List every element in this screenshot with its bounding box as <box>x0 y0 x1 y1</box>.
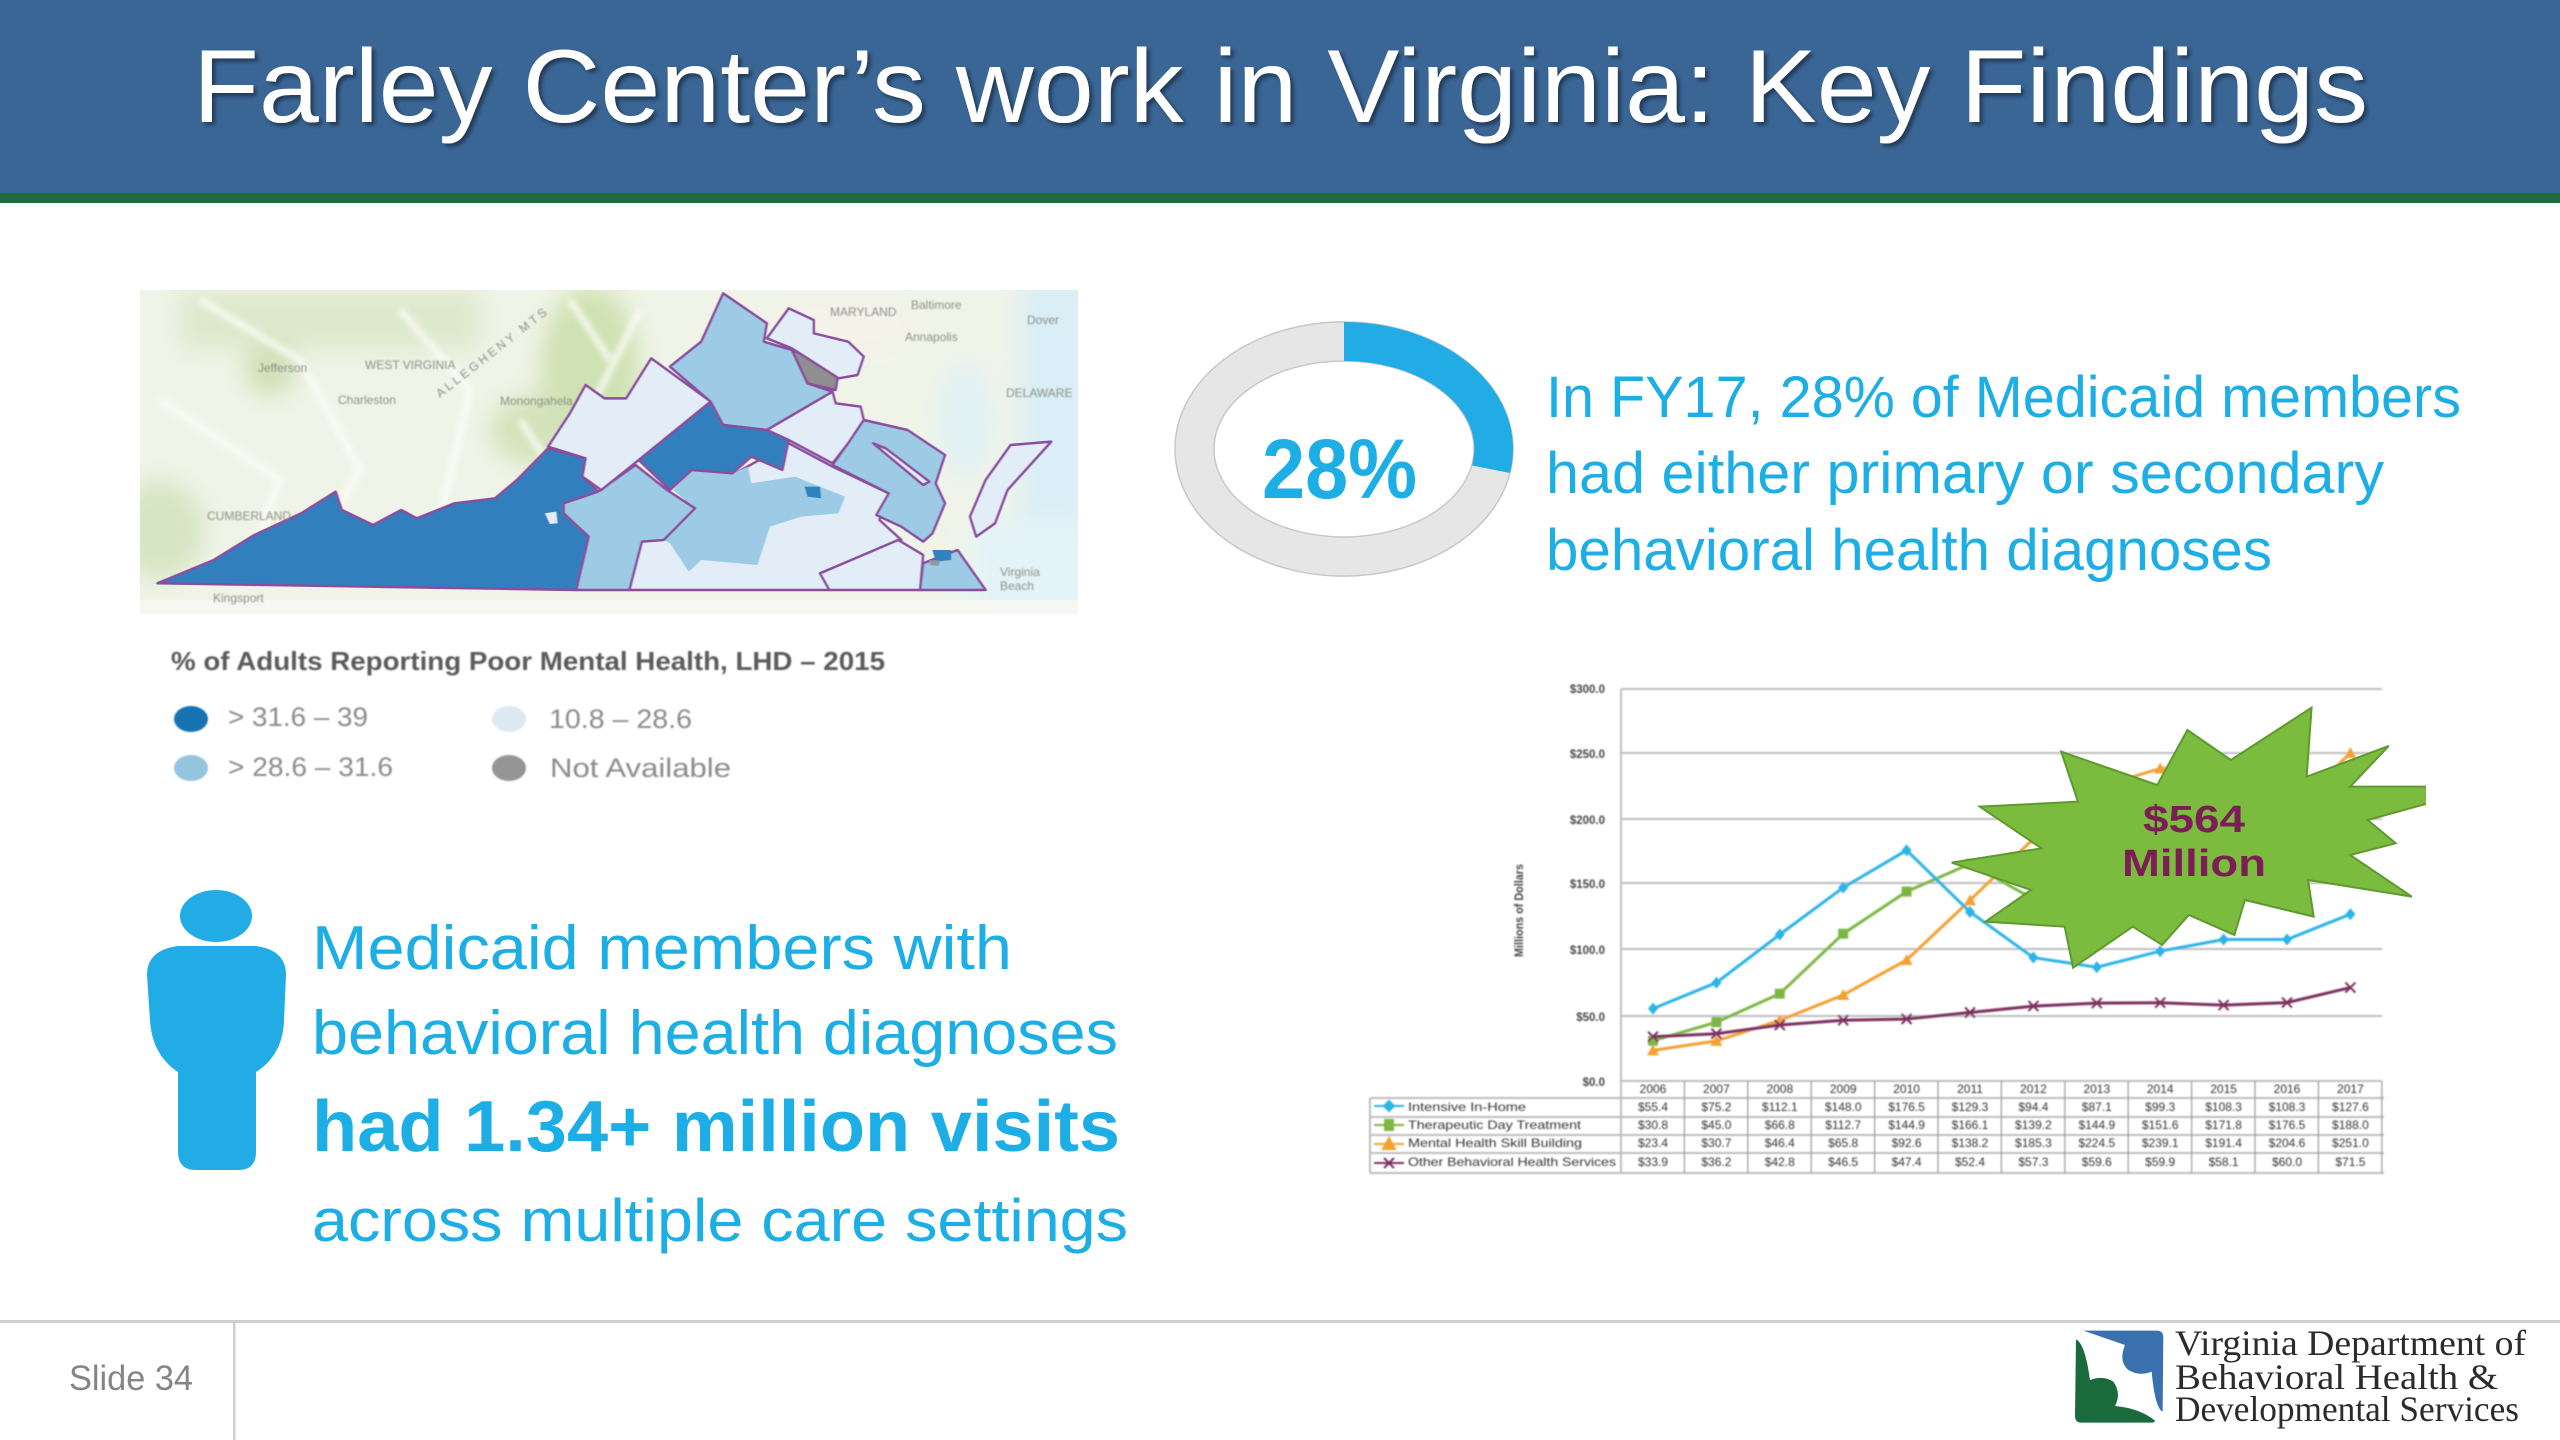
table row: therapeutic day treatment: $144.9 <box>1888 1118 1925 1132</box>
text block: FY17 statement: In FY17, 28% of Medicaid members <box>1546 365 2461 430</box>
data table grid <box>1370 1081 2384 1173</box>
logo wordmark: Virginia Department of <box>2175 1323 2526 1363</box>
table header years: 2016 <box>2274 1082 2301 1096</box>
callout: $564 million starburst <box>1952 708 2434 968</box>
table row: therapeutic day treatment: $139.2 <box>2015 1118 2052 1132</box>
table header years: 2014 <box>2147 1082 2174 1096</box>
table row: other behavioral health services: $59.9 <box>2145 1155 2176 1169</box>
table row: other behavioral health services: $59.6 <box>2082 1155 2112 1169</box>
legend item: gray: Not Available <box>550 753 731 783</box>
donut chart: 28% <box>1175 322 1513 576</box>
legend heading: % of Adults Reporting Poor Mental Health, LHD – 2015 <box>171 646 885 676</box>
table header years: 2013 <box>2083 1082 2110 1096</box>
table row: other behavioral health services: $52.4 <box>1955 1155 1985 1169</box>
table row: intensive in-home: $112.1 <box>1762 1100 1798 1114</box>
y axis labels: $250.0 <box>1570 749 1605 761</box>
map place labels: Charleston <box>338 393 396 407</box>
gridlines and axis <box>1619 687 2382 1083</box>
text block: FY17 statement: behavioral health diagnoses <box>1546 518 2272 583</box>
map terrain background <box>140 290 1078 614</box>
table row: mental health skill building: $30.7 <box>1701 1136 1732 1150</box>
table header years: 2009 <box>1830 1082 1857 1096</box>
table header years <box>1639 1084 2364 1094</box>
series: other behavioral health services <box>1653 988 2350 1037</box>
legend item: medium blue: > 28.6 – 31.6 <box>228 752 393 782</box>
table row: other behavioral health services: $36.2 <box>1701 1155 1732 1169</box>
table header years: 2008 <box>1766 1082 1793 1096</box>
table row: therapeutic day treatment <box>1374 1118 2369 1132</box>
legend item: pale blue <box>492 704 692 734</box>
table row: mental health skill building: $224.5 <box>2078 1136 2115 1150</box>
donut ring <box>1175 322 1513 576</box>
table row: therapeutic day treatment: Therapeutic Day Treatment <box>1408 1118 1582 1132</box>
text block: FY17 statement: had either primary or secondary <box>1546 441 2384 506</box>
table row: intensive in-home: $176.5 <box>1888 1100 1925 1114</box>
map place labels: Beach <box>1000 579 1034 593</box>
table row: mental health skill building: Mental Health Skill Building <box>1408 1136 1582 1150</box>
callout text: $564 <box>2143 799 2245 841</box>
table header years: 2012 <box>2020 1082 2047 1096</box>
table row: other behavioral health services: $47.4 <box>1892 1155 1922 1169</box>
map place labels: Jefferson <box>258 361 307 375</box>
map place labels: DELAWARE <box>1006 386 1072 400</box>
table row: mental health skill building: $92.6 <box>1892 1136 1922 1150</box>
table row: mental health skill building <box>1374 1136 2369 1150</box>
table row: other behavioral health services: $60.0 <box>2272 1155 2302 1169</box>
map place labels: Kingsport <box>213 591 264 605</box>
y axis title: Millions of Dollars <box>1514 864 1526 957</box>
table row: mental health skill building: $46.4 <box>1765 1136 1795 1150</box>
logo wordmark: Behavioral Health & <box>2175 1357 2498 1397</box>
donut arc <box>1344 322 1513 473</box>
table row: therapeutic day treatment: $66.8 <box>1765 1118 1795 1132</box>
text block: FY17 statement <box>1546 365 2461 583</box>
table header years: 2006 <box>1640 1082 1667 1096</box>
title: Farley Center’s work in Virginia: Key Findings <box>193 29 2368 145</box>
table row: intensive in-home: $108.3 <box>2269 1100 2306 1114</box>
map place labels: CUMBERLAND <box>207 509 291 523</box>
table row: therapeutic day treatment: $45.0 <box>1701 1118 1732 1132</box>
table row: other behavioral health services <box>1374 1155 2366 1169</box>
table row: intensive in-home: $94.4 <box>2018 1100 2049 1114</box>
y axis labels: $50.0 <box>1576 1012 1605 1024</box>
series: intensive in-home <box>1653 850 2350 1009</box>
table row: other behavioral health services: $58.1 <box>2209 1155 2239 1169</box>
text block: visits: behavioral health diagnoses <box>312 999 1118 1068</box>
map regions <box>158 293 1051 590</box>
table row: mental health skill building: $138.2 <box>1952 1136 1989 1150</box>
table row: other behavioral health services: $42.8 <box>1765 1155 1795 1169</box>
table row: therapeutic day treatment: $112.7 <box>1825 1118 1861 1132</box>
table row: other behavioral health services: $33.9 <box>1638 1155 1668 1169</box>
icon: person <box>147 890 286 1170</box>
table header years: 2007 <box>1703 1082 1730 1096</box>
table row: therapeutic day treatment: $144.9 <box>2078 1118 2115 1132</box>
y axis labels: $300.0 <box>1570 684 1605 696</box>
map place labels: ALLEGHENY MTS <box>433 303 552 400</box>
y axis labels: $0.0 <box>1583 1077 1605 1089</box>
logo: Virginia DBHDS <box>2075 1323 2526 1429</box>
legend item: dark blue: > 31.6 – 39 <box>228 702 368 732</box>
terrain bright strip <box>960 600 1078 614</box>
header band <box>0 0 2560 203</box>
text block: visits: had 1.34+ million visits <box>312 1087 1120 1167</box>
map place labels: Virginia <box>1000 565 1040 579</box>
table row: therapeutic day treatment: $30.8 <box>1638 1118 1668 1132</box>
table header years: 2015 <box>2210 1082 2237 1096</box>
table row: other behavioral health services: $46.5 <box>1828 1155 1859 1169</box>
map place labels: Baltimore <box>911 298 962 312</box>
table row: intensive in-home <box>1374 1100 2369 1114</box>
legend item: pale blue: 10.8 – 28.6 <box>549 704 692 734</box>
table row: intensive in-home: $99.3 <box>2145 1100 2176 1114</box>
table row: intensive in-home: $55.4 <box>1638 1100 1668 1114</box>
table row: therapeutic day treatment: $151.6 <box>2142 1118 2179 1132</box>
table header years: 2011 <box>1957 1082 1983 1096</box>
logo wordmark <box>2175 1323 2526 1429</box>
series: therapeutic day treatment <box>1647 858 2026 1047</box>
table row: mental health skill building: $239.1 <box>2142 1136 2179 1150</box>
table row: mental health skill building: $23.4 <box>1638 1136 1668 1150</box>
map place labels: Annapolis <box>905 330 958 344</box>
table row: intensive in-home: $129.3 <box>1952 1100 1989 1114</box>
text block: visits <box>312 914 1128 1254</box>
donut value: 28% <box>1262 422 1417 516</box>
y axis labels <box>1570 684 1605 1089</box>
table row: intensive in-home: $108.3 <box>2205 1100 2242 1114</box>
map place labels: WEST VIRGINIA <box>365 358 455 372</box>
table header years: 2017 <box>2337 1082 2364 1096</box>
table row: mental health skill building: $204.6 <box>2269 1136 2306 1150</box>
table row: mental health skill building: $191.4 <box>2205 1136 2242 1150</box>
table row: intensive in-home: $148.0 <box>1825 1100 1862 1114</box>
chart body <box>1370 684 2384 1173</box>
legend: map <box>171 646 885 783</box>
table row: mental health skill building: $65.8 <box>1828 1136 1859 1150</box>
map place labels: Dover <box>1027 313 1059 327</box>
text block: visits: across multiple care settings <box>312 1187 1128 1254</box>
panel: Virginia map <box>140 290 1078 614</box>
footer rules <box>0 1320 2560 1440</box>
y axis labels: $100.0 <box>1570 945 1605 957</box>
terrain ridges <box>162 298 642 530</box>
text block: visits: Medicaid members with <box>312 914 1012 983</box>
logo wordmark: Developmental Services <box>2175 1389 2519 1429</box>
table row: therapeutic day treatment: $176.5 <box>2269 1118 2306 1132</box>
table row: intensive in-home: $87.1 <box>2082 1100 2112 1114</box>
table row: mental health skill building: $251.0 <box>2332 1136 2369 1150</box>
table row: other behavioral health services: $71.5 <box>2335 1155 2366 1169</box>
table row: other behavioral health services: $57.3 <box>2018 1155 2049 1169</box>
table row: other behavioral health services: Other Behavioral Health Services <box>1408 1155 1616 1169</box>
table header years: 2010 <box>1893 1082 1920 1096</box>
table row: intensive in-home: $127.6 <box>2332 1100 2369 1114</box>
map place labels: Monongahela <box>500 394 573 408</box>
map place labels <box>207 298 1072 605</box>
table row: intensive in-home: Intensive In-Home <box>1408 1100 1526 1114</box>
map place labels: MARYLAND <box>830 305 897 319</box>
table row: therapeutic day treatment: $171.8 <box>2205 1118 2242 1132</box>
logo icon <box>2075 1331 2163 1423</box>
callout: $564 million starburst: Million <box>2122 843 2266 885</box>
y axis labels: $150.0 <box>1570 879 1605 891</box>
table row: therapeutic day treatment: $188.0 <box>2332 1118 2369 1132</box>
slide number: Slide 34 <box>69 1359 193 1398</box>
table row: intensive in-home: $75.2 <box>1701 1100 1732 1114</box>
y axis labels: $200.0 <box>1570 815 1605 827</box>
table row: mental health skill building: $185.3 <box>2015 1136 2052 1150</box>
line chart: behavioral health spending <box>1370 684 2434 1173</box>
legend item: gray <box>492 753 731 783</box>
table row: therapeutic day treatment: $166.1 <box>1952 1118 1989 1132</box>
series: mental health skill building <box>1653 753 2350 1050</box>
starburst shape <box>1952 708 2434 968</box>
